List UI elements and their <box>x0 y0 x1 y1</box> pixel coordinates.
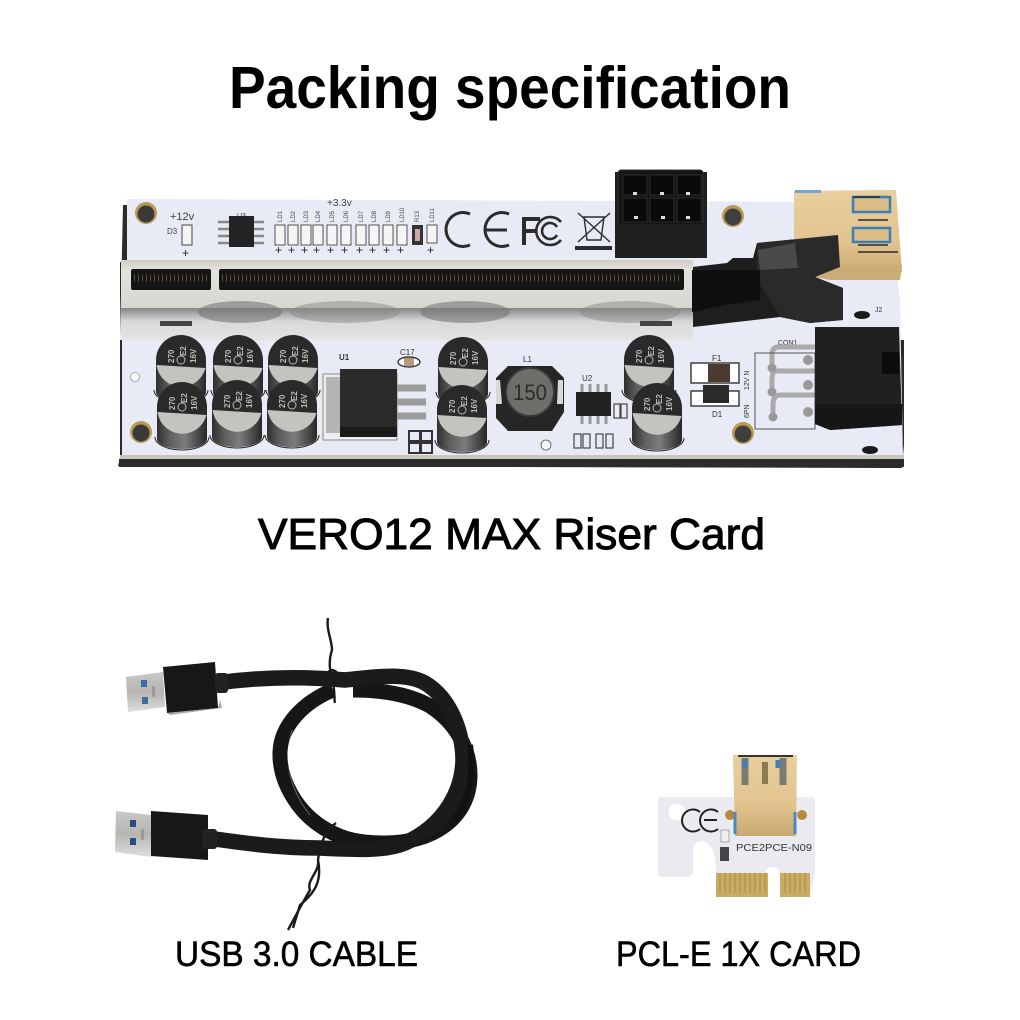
regulator U1 <box>323 353 432 453</box>
LED row: LD1 <box>278 210 284 222</box>
bottom USB plug <box>115 811 217 860</box>
LED row: LD9 <box>386 210 392 222</box>
title: Packing specification <box>229 55 791 121</box>
capacitors centre: 16V <box>470 398 479 413</box>
LED row: LD11 <box>430 207 436 222</box>
8-pin power connector with pins: J2 <box>875 307 882 314</box>
regulator U1: U1 <box>339 353 350 362</box>
LED row: +3.3v <box>327 198 352 209</box>
looped strand <box>280 690 470 843</box>
capacitor bank left: 16V <box>301 348 310 363</box>
capacitors right: 16V <box>665 396 674 411</box>
cable caption: USB 3.0 CABLE <box>175 935 418 974</box>
LED row: R13 <box>415 210 421 222</box>
12V indicator: +12v <box>170 211 195 223</box>
LED row: LD7 <box>359 210 365 222</box>
LED row: LD8 <box>372 210 378 222</box>
foam backing <box>118 205 904 468</box>
mounting hole <box>668 804 686 820</box>
chip U2 and small parts: U2 <box>582 374 593 383</box>
capacitor bank left: E2 <box>290 391 299 401</box>
capacitors right: 270 <box>643 397 652 411</box>
8-pin power connector with pins: CON1 <box>778 340 798 347</box>
capacitors centre <box>435 337 490 453</box>
capacitors right: 270 <box>635 349 644 363</box>
inductor L1 <box>496 355 564 431</box>
chip U3 <box>218 213 264 247</box>
12V indicator: D3 <box>167 227 178 236</box>
capacitor bank left: 16V <box>300 393 309 408</box>
LED row: + <box>327 243 334 257</box>
capacitor bank left: 16V <box>190 395 199 410</box>
capacitor bank left <box>154 335 320 450</box>
6-pin power connector top <box>615 170 707 258</box>
fuse F1 and diode D1: 6PN <box>744 404 751 418</box>
LED row <box>275 198 437 257</box>
LED row: + <box>383 243 390 257</box>
certification marks <box>446 212 612 250</box>
mounting solder points <box>725 810 735 820</box>
capacitor bank left: E2 <box>236 346 245 356</box>
chip U3: U3 <box>237 213 246 220</box>
8-pin power connector with pins <box>755 307 902 430</box>
capacitor bank left: 270 <box>168 396 177 410</box>
LED row: LD4 <box>316 210 322 222</box>
circuit board <box>122 199 903 458</box>
LED row: LD6 <box>344 210 350 222</box>
USB 3.0 port gold <box>794 190 902 280</box>
capacitors right: 16V <box>657 348 666 363</box>
black latch behind slot <box>692 235 843 327</box>
board marking: PCE2PCE-N09 <box>736 843 812 854</box>
mounting holes <box>130 202 878 454</box>
PCIe x16 metal slot <box>121 260 693 340</box>
fuse F1 and diode D1: D1 <box>712 410 723 419</box>
capacitor bank left: 270 <box>224 349 233 363</box>
capacitor bank left: E2 <box>235 391 244 401</box>
LED row: + <box>427 243 434 257</box>
top USB plug <box>126 662 228 715</box>
fuse F1 and diode D1: 12V N <box>744 371 751 390</box>
capacitor bank left: 16V <box>245 393 254 408</box>
card caption: PCL-E 1X CARD <box>616 935 861 974</box>
top twist tie <box>326 618 342 703</box>
latch front <box>692 235 843 323</box>
capacitors centre: E2 <box>461 348 470 358</box>
USB cable photo <box>115 618 471 930</box>
gold fingers <box>716 873 768 897</box>
capacitor C17 <box>398 348 420 367</box>
capacitor C17: C17 <box>400 348 415 357</box>
LED row: LD2 <box>291 210 297 222</box>
capacitors centre: 270 <box>449 351 458 365</box>
riser card photo <box>118 170 904 468</box>
LED row: + <box>341 243 348 257</box>
LED row: + <box>275 243 282 257</box>
LED row: LD10 <box>400 207 406 222</box>
USB socket <box>733 755 797 836</box>
LED row: + <box>369 243 376 257</box>
capacitor bank left: 270 <box>223 394 232 408</box>
fuse F1 and diode D1 <box>691 354 751 419</box>
PCI-E 1X card photo <box>658 755 815 897</box>
LED row: LD3 <box>304 210 310 222</box>
riser card caption: VERO12 MAX Riser Card <box>258 510 765 559</box>
fuse F1 and diode D1: F1 <box>712 354 722 363</box>
LED row: + <box>301 243 308 257</box>
capacitor bank left: 270 <box>279 349 288 363</box>
capacitor bank left: 270 <box>167 349 176 363</box>
capacitor bank left: E2 <box>180 393 189 403</box>
capacitors right: E2 <box>655 394 664 404</box>
cable to top plug <box>208 676 463 849</box>
capacitor bank left: E2 <box>179 346 188 356</box>
chip U2 and small parts <box>574 374 627 448</box>
capacitor bank left: 270 <box>278 394 287 408</box>
capacitors centre: 270 <box>448 399 457 413</box>
capacitor bank left: 16V <box>189 348 198 363</box>
capacitor bank left: E2 <box>291 346 300 356</box>
capacitors right <box>622 335 684 451</box>
white board <box>658 797 815 897</box>
inductor L1: 150 <box>513 380 547 405</box>
capacitors right: E2 <box>647 346 656 356</box>
inductor L1: L1 <box>523 355 532 364</box>
12V indicator <box>167 211 195 260</box>
CE mark <box>682 810 718 832</box>
capacitor bank left: 16V <box>246 348 255 363</box>
LED row: + <box>356 243 363 257</box>
status LED <box>721 830 729 842</box>
LED row: + <box>288 243 295 257</box>
12V indicator: + <box>182 246 189 260</box>
LED row: + <box>397 243 404 257</box>
bottom twist tie <box>288 823 336 930</box>
LED row: + <box>313 243 320 257</box>
LED row: LD5 <box>330 210 336 222</box>
capacitors centre: 16V <box>471 350 480 365</box>
capacitors centre: E2 <box>460 396 469 406</box>
